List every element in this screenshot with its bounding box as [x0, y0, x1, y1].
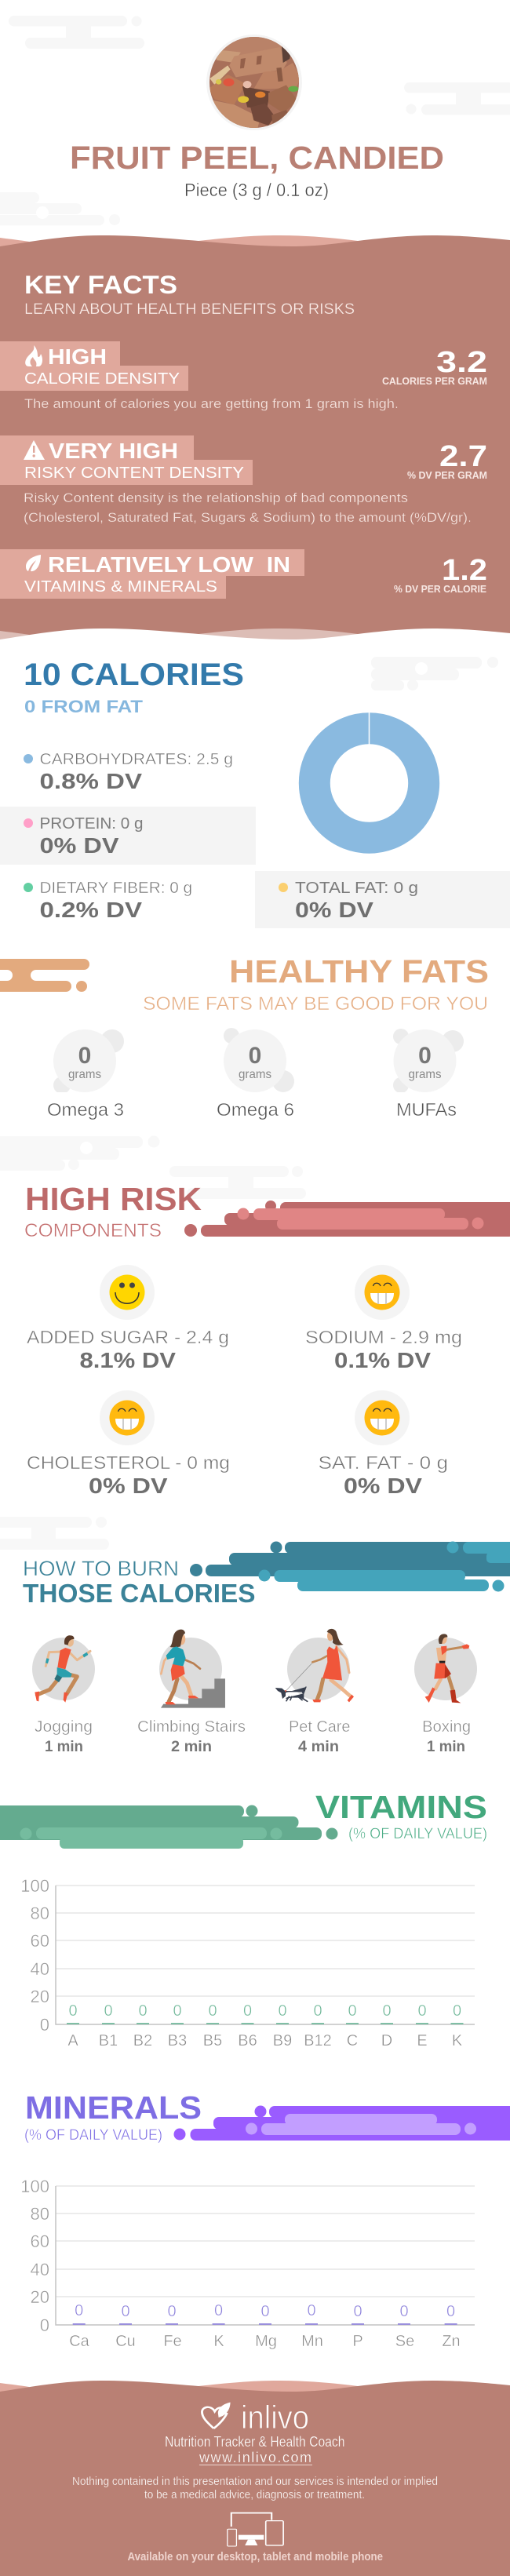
- red cloud: [184, 1201, 510, 1237]
- fat: mufas: grams: [408, 1068, 441, 1081]
- bar chart: vitamins: A: [67, 2032, 78, 2050]
- panel: high risk components: [0, 1136, 510, 1498]
- label: Pet Care: [289, 1718, 350, 1736]
- green cloud: [0, 1805, 337, 1849]
- bar chart: minerals: Zn: [442, 2333, 461, 2350]
- fat: omega 6: Omega 6: [217, 1099, 294, 1120]
- description: (Cholesterol, Saturated Fat, Sugars & Sodium) to the amount (%DV/gr).: [24, 511, 472, 525]
- bar chart: vitamins: 0: [104, 2002, 113, 2020]
- bar chart: minerals: 80: [31, 2204, 49, 2224]
- tag background: [0, 341, 188, 391]
- description: Risky Content density is the relationship of bad components: [24, 491, 408, 505]
- tag background: [0, 435, 253, 485]
- bar chart: vitamins: D: [381, 2032, 392, 2050]
- description: [24, 491, 472, 525]
- time: 4 min: [298, 1739, 339, 1755]
- value: 2.7: [439, 440, 487, 473]
- bar chart: vitamins: [20, 1876, 475, 2050]
- component: cholesterol: [27, 1390, 230, 1498]
- panel: vitamins: [0, 1789, 487, 2050]
- description: The amount of calories you are getting from 1 gram is high.: [24, 397, 399, 411]
- bar chart: vitamins: B5: [203, 2032, 222, 2050]
- bar chart: vitamins: 40: [31, 1959, 49, 1979]
- panel: footer: [0, 2381, 510, 2576]
- value: 1.2: [442, 554, 487, 587]
- bar chart: vitamins: 0: [313, 2002, 322, 2020]
- component: added sugar: [27, 1265, 229, 1372]
- fat: omega 3: 0: [78, 1043, 91, 1069]
- bar chart: minerals: P: [352, 2333, 363, 2350]
- bar chart: vitamins: B12: [304, 2032, 332, 2050]
- nutrient: dietary fiber: DIETARY FIBER: 0 g: [39, 880, 192, 897]
- fat: omega 3: grams: [68, 1068, 101, 1081]
- icon: heart and leaf logo: [202, 2403, 231, 2428]
- unit: % DV PER GRAM: [407, 470, 487, 481]
- tag background: [0, 549, 304, 599]
- bar chart: minerals: 0: [121, 2303, 130, 2320]
- bar chart: vitamins: 0: [138, 2002, 148, 2020]
- bar chart: vitamins: 0: [453, 2002, 461, 2020]
- bar chart: vitamins: B9: [273, 2032, 292, 2050]
- header panel: [72, 35, 443, 200]
- rating: VERY HIGH: [49, 439, 178, 463]
- fat: omega 6: grams: [239, 1068, 271, 1081]
- heading: HEALTHY FATS: [229, 953, 489, 989]
- activity: boxing: [414, 1634, 477, 1755]
- label: RISKY CONTENT DENSITY: [24, 465, 244, 482]
- value: 3.2: [436, 346, 487, 379]
- bar chart: minerals: 0: [353, 2303, 362, 2320]
- fat: omega 3: Omega 3: [47, 1099, 124, 1120]
- bar chart: minerals: K: [213, 2333, 224, 2350]
- icon: devices: [228, 2513, 283, 2546]
- bar chart: minerals: Ca: [69, 2333, 90, 2350]
- wave background: [0, 2381, 510, 2576]
- bar chart: minerals: 0: [214, 2302, 223, 2319]
- bar chart: vitamins: 0: [243, 2002, 252, 2020]
- label: Boxing: [422, 1718, 471, 1736]
- subheading: SOME FATS MAY BE GOOD FOR YOU: [143, 993, 488, 1015]
- background cloud: [371, 657, 498, 690]
- panel: calories: [0, 657, 510, 928]
- bar chart: minerals: 20: [31, 2287, 49, 2307]
- label: VITAMINS & MINERALS: [24, 578, 217, 596]
- icon: smiling face: [100, 1265, 155, 1320]
- donut chart: [315, 712, 424, 838]
- unit: % DV PER CALORIE: [394, 584, 486, 595]
- bar chart: minerals: 0: [167, 2303, 177, 2320]
- heading line 1: HOW TO BURN: [23, 1557, 179, 1580]
- component: saturated fat: SAT. FAT - 0 g: [319, 1452, 448, 1473]
- icon: grinning face: [355, 1390, 410, 1445]
- nutrient: protein: 0% DV: [39, 833, 119, 858]
- component: cholesterol: 0% DV: [89, 1474, 168, 1498]
- bar chart: vitamins: 20: [31, 1987, 49, 2006]
- bar chart: vitamins: 0: [68, 2002, 78, 2020]
- bar chart: minerals: 40: [31, 2260, 49, 2279]
- fat: mufas: [393, 1029, 464, 1120]
- bar chart: minerals: 60: [31, 2232, 49, 2251]
- background cloud left: [0, 192, 120, 226]
- food photo: chocolate pieces: [206, 35, 302, 130]
- nutrient: total fat: 0% DV: [295, 898, 373, 922]
- bar chart: vitamins: 0: [208, 2002, 217, 2020]
- rating: RELATIVELY LOW IN: [48, 552, 290, 577]
- heading: HIGH RISK: [25, 1181, 202, 1217]
- heading: MINERALS: [25, 2090, 202, 2126]
- component: added sugar: ADDED SUGAR - 2.4 g: [27, 1327, 229, 1347]
- bar chart: minerals: Mg: [255, 2333, 277, 2350]
- icon: jogger: [35, 1635, 90, 1703]
- time: 1 min: [45, 1739, 83, 1755]
- bar chart: minerals: 0: [307, 2302, 316, 2319]
- bar chart: vitamins: 0: [417, 2002, 427, 2020]
- component: added sugar: 8.1% DV: [80, 1348, 176, 1372]
- bar chart: minerals: 100: [20, 2177, 49, 2196]
- background cloud right: [404, 82, 510, 115]
- subheading: COMPONENTS: [24, 1220, 162, 1241]
- bar chart: vitamins: 0: [40, 2015, 49, 2035]
- background cloud centre: [169, 1166, 306, 1199]
- title: FRUIT PEEL, CANDIED: [70, 140, 444, 176]
- nutrient: dietary fiber: [24, 880, 192, 922]
- icon: boxer: [425, 1634, 469, 1703]
- label: CALORIE DENSITY: [24, 370, 180, 388]
- nutrient: total fat: [255, 871, 510, 928]
- nutrient: carbohydrates: CARBOHYDRATES: 2.5 g: [39, 751, 233, 768]
- fat: mufas: MUFAs: [396, 1099, 457, 1120]
- bar chart: vitamins: 0: [348, 2002, 357, 2020]
- component: sodium: SODIUM - 2.9 mg: [305, 1327, 462, 1347]
- nutrient: protein: [0, 807, 256, 865]
- icon: warning: [24, 440, 45, 460]
- bar chart: minerals: Mn: [301, 2333, 323, 2350]
- orange cloud: [0, 959, 89, 992]
- bar chart: vitamins: B3: [168, 2032, 187, 2050]
- panel: healthy fats: [0, 953, 489, 1120]
- heading: 10 CALORIES: [24, 658, 244, 692]
- nutrient: protein: PROTEIN: 0 g: [39, 815, 143, 833]
- panel: key facts: [0, 235, 510, 660]
- website: www.inlivo.com: [199, 2450, 311, 2465]
- panel: how to burn calories: [0, 1517, 510, 1755]
- heading line 2: THOSE CALORIES: [23, 1579, 256, 1608]
- component: saturated fat: [319, 1390, 448, 1498]
- bar chart: minerals: 0: [399, 2303, 409, 2320]
- nutrient: total fat: TOTAL FAT: 0 g: [295, 880, 418, 897]
- panel: minerals: [20, 2090, 510, 2350]
- icon: leaf: [26, 555, 41, 571]
- serving size: Piece (3 g / 0.1 oz): [184, 180, 329, 200]
- component: saturated fat: 0% DV: [344, 1474, 422, 1498]
- icon: grinning face: [100, 1390, 155, 1445]
- disclaimer: [72, 2475, 438, 2501]
- bar chart: vitamins: 80: [31, 1904, 49, 1923]
- subheading: (% OF DAILY VALUE): [24, 2127, 162, 2144]
- bar chart: minerals: 0: [446, 2303, 455, 2320]
- bar chart: minerals: 0: [40, 2315, 49, 2335]
- subheading: LEARN ABOUT HEALTH BENEFITS OR RISKS: [24, 301, 355, 318]
- heading: VITAMINS: [315, 1789, 487, 1825]
- activity: pet care: [275, 1629, 354, 1755]
- bar chart: vitamins: 0: [382, 2002, 392, 2020]
- availability note: Available on your desktop, tablet and mobile phone: [127, 2550, 383, 2563]
- bar chart: vitamins: 0: [173, 2002, 182, 2020]
- bar chart: vitamins: B2: [133, 2032, 152, 2050]
- time: 2 min: [171, 1739, 212, 1755]
- nutrient: carbohydrates: 0.8% DV: [39, 769, 142, 793]
- component: sodium: [305, 1265, 462, 1372]
- component: sodium: 0.1% DV: [334, 1348, 431, 1372]
- bar chart: vitamins: 60: [31, 1931, 49, 1951]
- nutrient: dietary fiber: 0.2% DV: [39, 898, 142, 922]
- background cloud: [0, 1517, 109, 1550]
- bar chart: minerals: 0: [75, 2302, 83, 2319]
- bar chart: vitamins: K: [452, 2032, 463, 2050]
- activity: jogging: [32, 1635, 95, 1755]
- time: 1 min: [427, 1739, 465, 1755]
- bar chart: vitamins: 0: [278, 2002, 287, 2020]
- vitamins and minerals block: [0, 549, 487, 599]
- icon: climber: [161, 1630, 225, 1708]
- disclaimer: to be a medical advice, diagnosis or treatment.: [144, 2488, 365, 2501]
- fat: omega 3: [47, 1029, 124, 1120]
- bar chart: minerals: [20, 2177, 475, 2350]
- fat: omega 6: [217, 1028, 294, 1120]
- fat: omega 6: 0: [249, 1043, 261, 1069]
- bar chart: vitamins: C: [347, 2032, 358, 2050]
- background cloud left: [0, 1136, 160, 1171]
- bar chart: vitamins: B1: [99, 2032, 118, 2050]
- purple cloud: [174, 2106, 510, 2141]
- bar chart: vitamins: E: [417, 2032, 428, 2050]
- wave background: [0, 235, 510, 660]
- label: Climbing Stairs: [137, 1718, 246, 1736]
- tagline: Nutrition Tracker & Health Coach: [165, 2434, 345, 2450]
- unit: CALORIES PER GRAM: [382, 376, 487, 387]
- activity: climbing stairs: [137, 1630, 246, 1755]
- icon: grinning face: [355, 1265, 410, 1320]
- nutrient: carbohydrates: [24, 751, 233, 793]
- icon: flame: [25, 345, 42, 366]
- bar chart: vitamins: B6: [238, 2032, 257, 2050]
- fat: mufas: 0: [418, 1043, 432, 1069]
- bar chart: minerals: Fe: [163, 2333, 182, 2350]
- icon: woman walking dog: [275, 1629, 354, 1702]
- component: cholesterol: CHOLESTEROL - 0 mg: [27, 1452, 230, 1473]
- bar chart: minerals: Se: [395, 2333, 414, 2350]
- teal cloud: [190, 1541, 510, 1591]
- heading: KEY FACTS: [24, 271, 177, 299]
- bar chart: vitamins: 100: [20, 1876, 49, 1896]
- brand name: inlivo: [241, 2399, 309, 2436]
- background cloud top left: [9, 16, 144, 49]
- disclaimer: Nothing contained in this presentation and our services is intended or implied: [72, 2475, 438, 2488]
- bar chart: minerals: Cu: [115, 2333, 136, 2350]
- label: Jogging: [35, 1718, 93, 1736]
- subheading: 0 FROM FAT: [24, 697, 144, 716]
- calorie density block: [0, 341, 487, 411]
- bar chart: minerals: 0: [260, 2303, 270, 2320]
- rating: HIGH: [48, 344, 107, 369]
- risky content density block: [0, 435, 487, 525]
- subheading: (% OF DAILY VALUE): [348, 1826, 487, 1842]
